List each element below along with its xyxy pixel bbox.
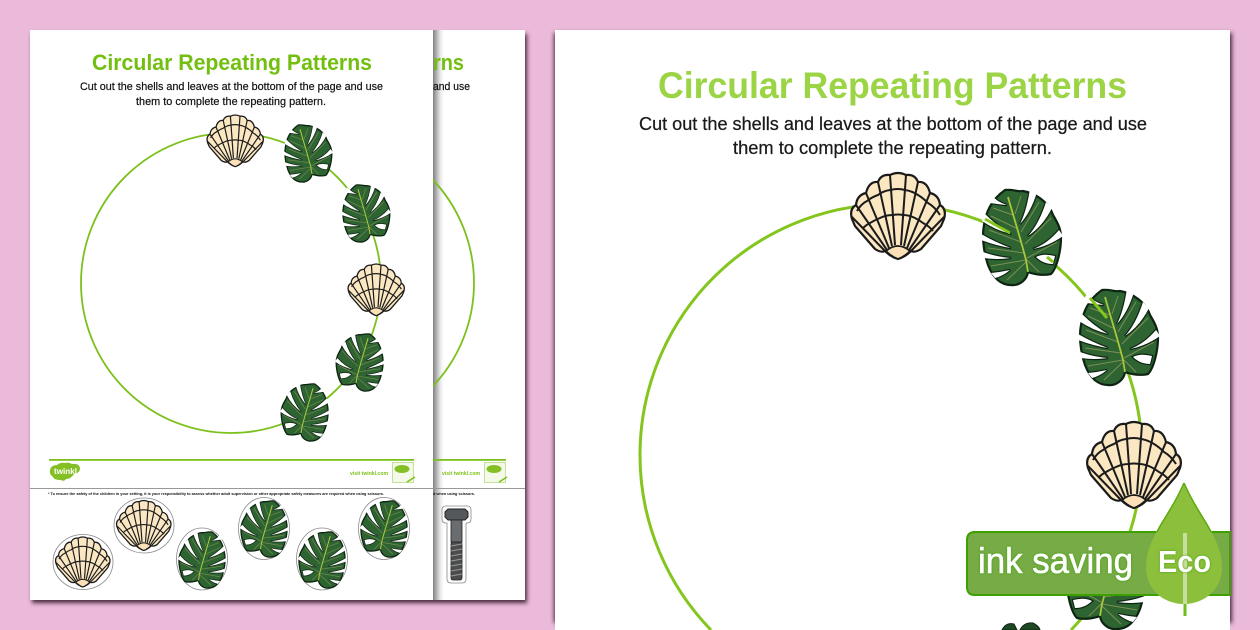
shell 2 [348, 264, 404, 316]
eco label: Eco [1158, 544, 1211, 579]
enlarged instructions [639, 114, 1147, 158]
safety note: * To ensure the safety of the children in your setting, it is your responsibility to assess whether adult supervision or other appropriate safety measures are required when using scissors. [48, 492, 384, 496]
back page footer badge [484, 462, 507, 482]
cut line [30, 488, 433, 489]
shell 1 [207, 115, 263, 167]
shadow: front page edge [433, 30, 445, 600]
panel: front worksheet page [30, 30, 433, 600]
circle visible through leaf gaps [985, 219, 1107, 318]
pattern circle [81, 133, 381, 433]
enlarged leaf 4 [1002, 623, 1040, 630]
back page footer line [433, 459, 506, 461]
enlarged leaf 2 [1078, 288, 1160, 385]
footer link: visit twinkl.com [350, 471, 388, 477]
back page circle [174, 133, 474, 433]
panel: enlarged worksheet page [555, 30, 1230, 630]
back page footer link: visit twinkl.com [442, 471, 480, 477]
title: Circular Repeating Patterns [92, 50, 372, 75]
twinkl logo: twinkl [54, 467, 77, 476]
cut-out leaf 3 [296, 528, 348, 590]
icon: bolt cut-out [442, 506, 471, 583]
twinkl logo [50, 463, 80, 481]
enlarged leaf 1 [981, 188, 1063, 285]
enlarged instructions: Cut out the shells and leaves at the bottom of the page and use [639, 114, 1147, 134]
footer line [49, 459, 414, 461]
enlarged pattern circle [640, 204, 1142, 630]
banner [967, 532, 1230, 595]
instructions [80, 81, 383, 108]
back page safety note fragment: d when using scissors. [433, 492, 475, 496]
panel: back worksheet page [125, 30, 525, 600]
leaf 2 [342, 184, 391, 242]
leaf 1 [284, 124, 333, 182]
enlarged leaf 3 [1065, 532, 1147, 629]
leaf 3 [335, 333, 384, 391]
enlarged shell 1 [851, 173, 945, 259]
instructions: them to complete the repeating pattern. [136, 96, 326, 108]
leaf 4 [280, 383, 329, 441]
back page title fragment: rns [433, 50, 464, 75]
cut-out leaf 1 [176, 528, 228, 590]
banner label: ink saving [978, 540, 1133, 581]
cut-out leaf 2 [238, 498, 290, 560]
enlarged title: Circular Repeating Patterns [658, 65, 1127, 106]
back page instruction fragment: and use [433, 81, 470, 93]
footer badge [392, 462, 415, 482]
instructions: Cut out the shells and leaves at the bottom of the page and use [80, 81, 383, 93]
enlarged instructions: them to complete the repeating pattern. [733, 138, 1052, 158]
cut-out shell 2 [114, 498, 174, 553]
icon: eco leaf drop [1146, 483, 1222, 616]
cut-out shell 1 [53, 534, 113, 590]
cut-out leaf 4 [358, 498, 410, 560]
enlarged shell 2 [1087, 422, 1181, 508]
back page cut line [433, 488, 525, 489]
badge: ink saving eco [967, 483, 1230, 616]
